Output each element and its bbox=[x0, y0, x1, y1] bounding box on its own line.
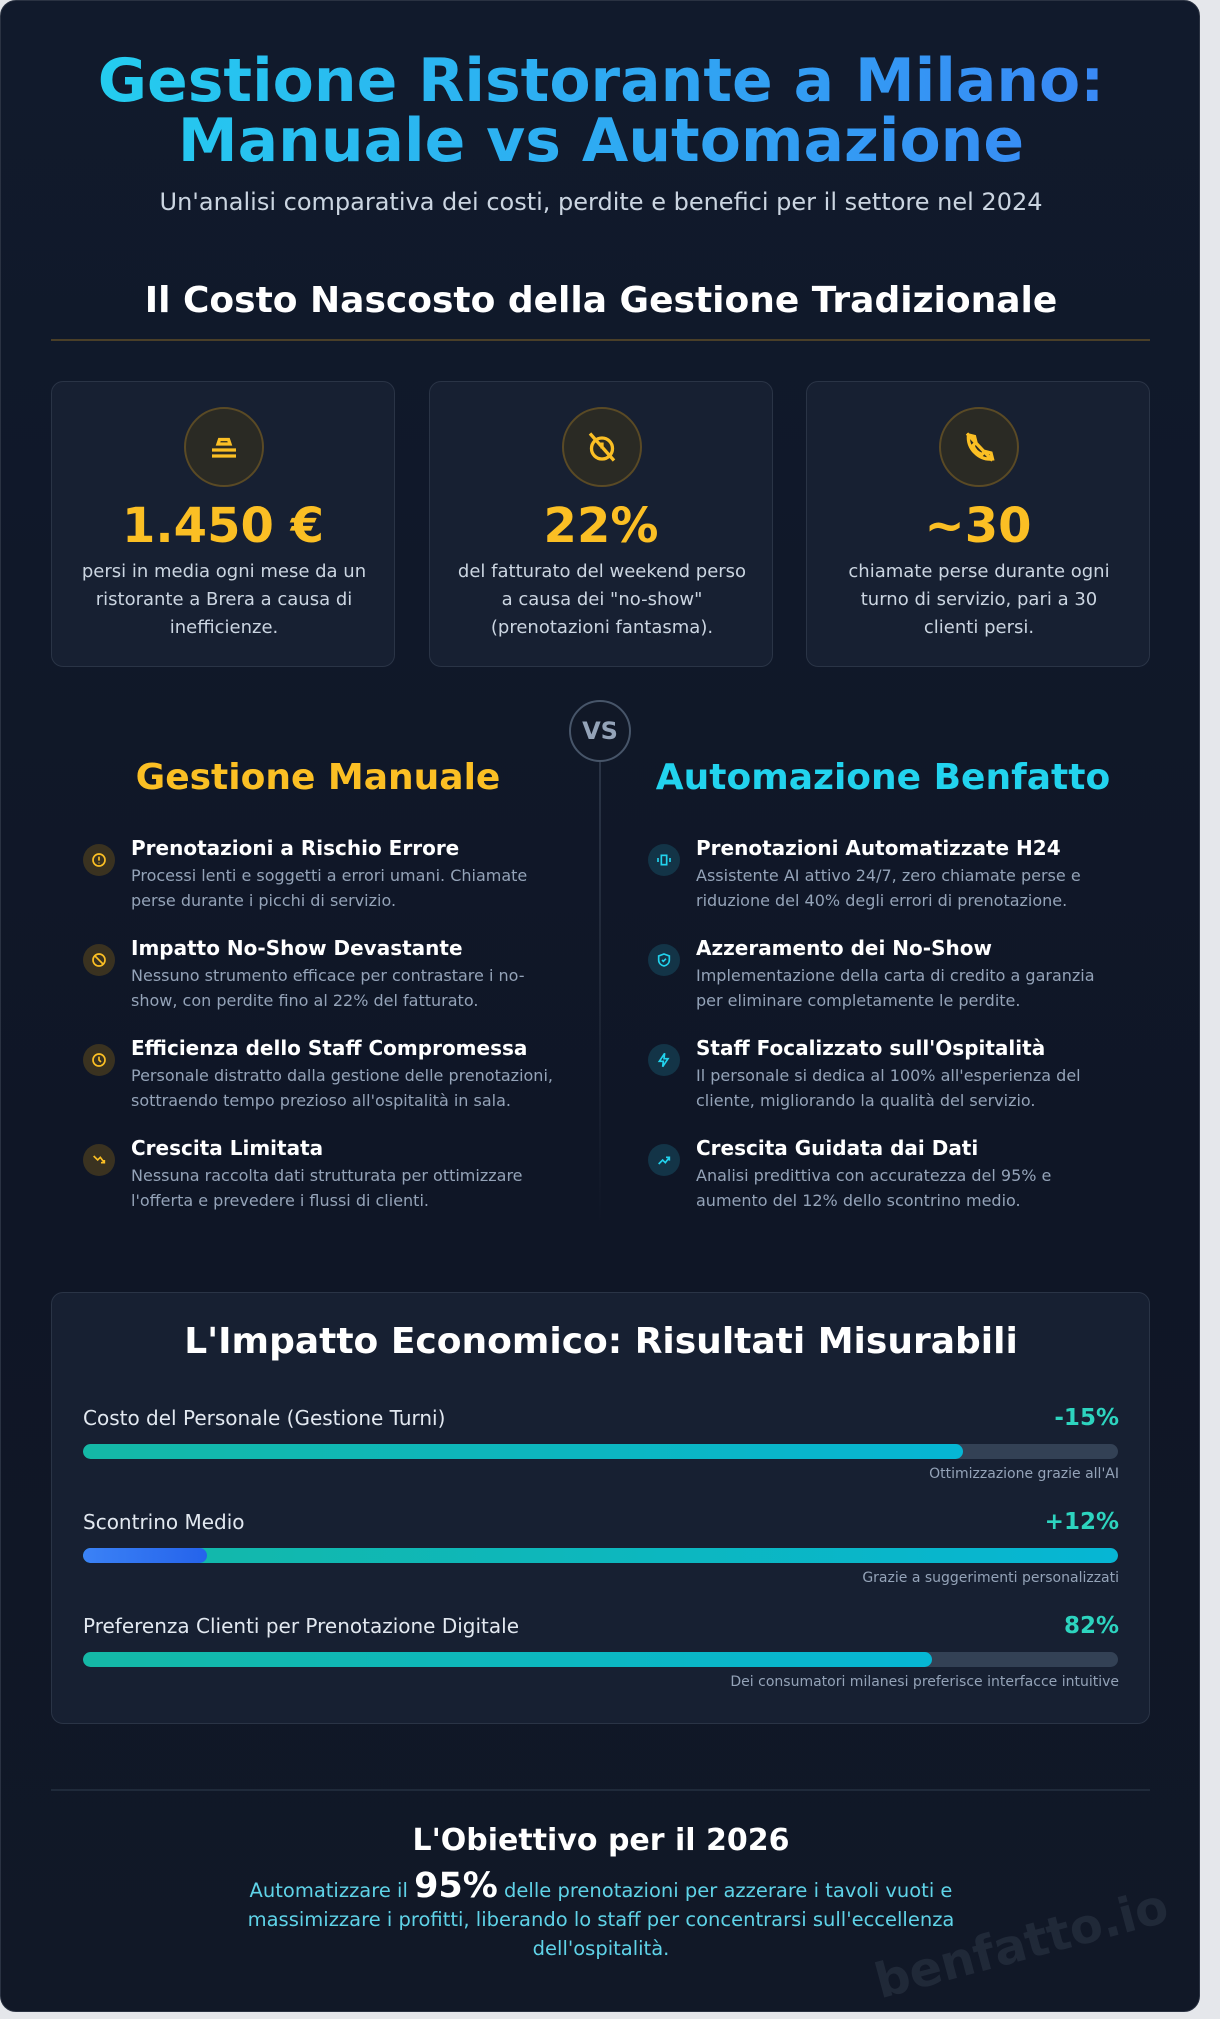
description: (prenotazioni fantasma). bbox=[491, 617, 713, 638]
item: Nessuna raccolta dati strutturata per ottimizzare bbox=[131, 1166, 523, 1185]
bar row 3 bbox=[83, 1613, 1119, 1690]
description: inefficienze. bbox=[170, 617, 278, 638]
item: show, con perdite fino al 22% del fatturato. bbox=[131, 991, 478, 1010]
goal text: Automatizzare il 95% delle prenotazioni per azzerare i tavoli vuoti e massimizzare i profitti, liberando lo staff per concentrarsi sull'eccellenza dell'ospitalità. bbox=[248, 1866, 954, 1960]
item bbox=[648, 1136, 1051, 1210]
bar row 2: Grazie a suggerimenti personalizzati bbox=[862, 1570, 1119, 1586]
item bbox=[83, 1036, 553, 1110]
number: ~30 bbox=[924, 498, 1032, 554]
item: aumento del 12% dello scontrino medio. bbox=[696, 1191, 1021, 1210]
description bbox=[82, 561, 366, 638]
item: Crescita Guidata dai Dati bbox=[696, 1136, 978, 1160]
item: Analisi predittiva con accuratezza del 95% e bbox=[696, 1166, 1051, 1185]
number: 22% bbox=[544, 498, 658, 554]
description: persi in media ogni mese da un bbox=[82, 561, 366, 582]
item bbox=[83, 836, 527, 910]
panel: economic impact bbox=[51, 1292, 1150, 1724]
item: Impatto No-Show Devastante bbox=[131, 936, 463, 960]
item: Crescita Limitata bbox=[131, 1136, 323, 1160]
number: 1.450 € bbox=[122, 498, 324, 554]
bar row 3: 82% bbox=[1064, 1613, 1119, 1639]
icon: phone off bbox=[939, 407, 1019, 487]
item: Efficienza dello Staff Compromessa bbox=[131, 1036, 527, 1060]
item: Nessuno strumento efficace per contrastare i no- bbox=[131, 966, 524, 985]
vs badge: VS bbox=[582, 717, 618, 745]
item bbox=[648, 836, 1081, 910]
bar row 1: -15% bbox=[1054, 1405, 1119, 1431]
item: Implementazione della carta di credito a garanzia bbox=[696, 966, 1095, 985]
item: riduzione del 40% degli errori di prenotazione. bbox=[696, 891, 1067, 910]
bar row 3: Preferenza Clienti per Prenotazione Digitale bbox=[83, 1614, 519, 1638]
item bbox=[83, 1136, 523, 1210]
item: l'offerta e prevedere i flussi di clienti. bbox=[131, 1191, 429, 1210]
stat card 1 bbox=[51, 381, 395, 667]
title bbox=[1, 51, 1201, 171]
description: ristorante a Brera a causa di bbox=[96, 589, 352, 610]
item: Prenotazioni a Rischio Errore bbox=[131, 836, 459, 860]
manual list bbox=[83, 836, 553, 1210]
description: del fatturato del weekend perso bbox=[458, 561, 746, 582]
heading: hidden cost: Il Costo Nascosto della Gestione Tradizionale bbox=[145, 280, 1057, 321]
item: perse durante i picchi di servizio. bbox=[131, 891, 396, 910]
bar row 2 bbox=[83, 1509, 1119, 1586]
item: Prenotazioni Automatizzate H24 bbox=[696, 836, 1061, 860]
item: Assistente AI attivo 24/7, zero chiamate perse e bbox=[696, 866, 1081, 885]
bar row 2: +12% bbox=[1045, 1509, 1119, 1535]
item: Staff Focalizzato sull'Ospitalità bbox=[696, 1036, 1045, 1060]
item: Processi lenti e soggetti a errori umani. Chiamate bbox=[131, 866, 527, 885]
stat card 2 bbox=[429, 381, 773, 667]
bar row 1: Ottimizzazione grazie all'AI bbox=[929, 1466, 1119, 1482]
stat card 3 bbox=[806, 381, 1150, 667]
item: per eliminare completamente le perdite. bbox=[696, 991, 1020, 1010]
title: Manuale vs Automazione bbox=[178, 106, 1024, 176]
item bbox=[648, 1036, 1081, 1110]
watermark: benfatto.io bbox=[869, 1878, 1174, 2010]
item: Azzeramento dei No-Show bbox=[696, 936, 992, 960]
item: cliente, migliorando la qualità del servizio. bbox=[696, 1091, 1036, 1110]
bar row 1 bbox=[83, 1405, 1119, 1482]
title: Gestione Ristorante a Milano: bbox=[98, 46, 1104, 116]
heading: impact: L'Impatto Economico: Risultati Misurabili bbox=[184, 1321, 1018, 1362]
vs badge bbox=[569, 700, 631, 762]
description bbox=[848, 561, 1110, 638]
icon: no clock bbox=[562, 407, 642, 487]
description: a causa dei "no-show" bbox=[502, 589, 702, 610]
item: sottraendo tempo prezioso all'ospitalità in sala. bbox=[131, 1091, 511, 1110]
description: turno di servizio, pari a 30 bbox=[861, 589, 1097, 610]
description: chiamate perse durante ogni bbox=[848, 561, 1110, 582]
heading: goal: L'Obiettivo per il 2026 bbox=[412, 1823, 790, 1858]
heading: manual: Gestione Manuale bbox=[136, 757, 500, 798]
item: Il personale si dedica al 100% all'esperienza del bbox=[696, 1066, 1081, 1085]
bar row 3: Dei consumatori milanesi preferisce interfacce intuitive bbox=[730, 1674, 1119, 1690]
item bbox=[83, 936, 524, 1010]
item bbox=[648, 936, 1095, 1010]
heading: automation: Automazione Benfatto bbox=[656, 757, 1110, 798]
bar row 1: Costo del Personale (Gestione Turni) bbox=[83, 1406, 445, 1430]
bar row 2: Scontrino Medio bbox=[83, 1510, 245, 1534]
description: clienti persi. bbox=[924, 617, 1034, 638]
item: Personale distratto dalla gestione delle prenotazioni, bbox=[131, 1066, 553, 1085]
icon: money bbox=[184, 407, 264, 487]
description bbox=[458, 561, 746, 638]
automation list bbox=[648, 836, 1095, 1210]
subtitle: Un'analisi comparativa dei costi, perdite e benefici per il settore nel 2024 bbox=[160, 188, 1042, 216]
